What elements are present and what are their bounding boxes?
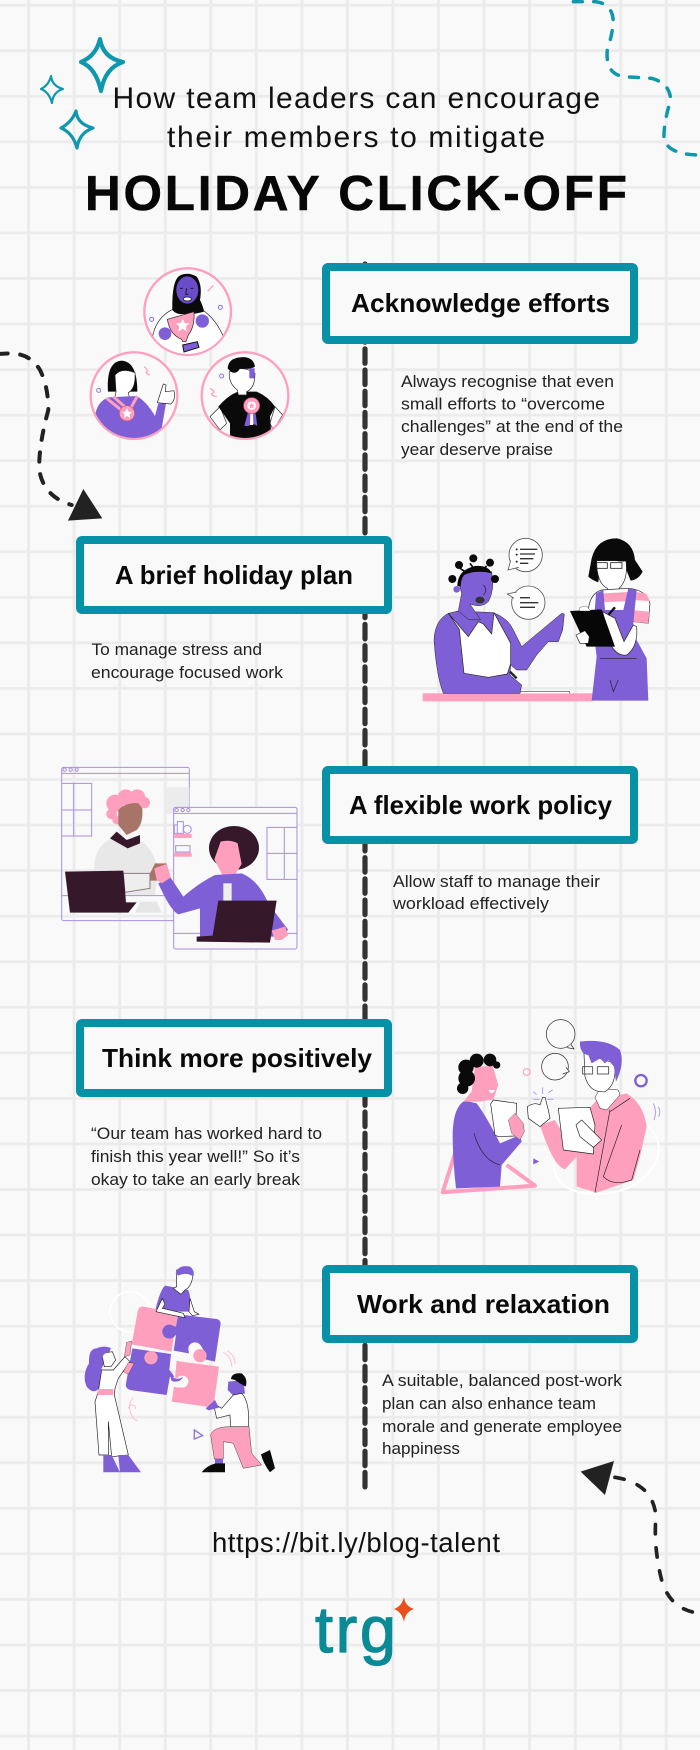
subtitle: How team leaders can encourage [112, 82, 600, 115]
icon: medium teal sparkle [61, 111, 93, 148]
man right [202, 1373, 275, 1472]
panel: flexible work policy heading [326, 770, 634, 840]
text: brief holiday plan [91, 640, 284, 682]
central dashed timeline [362, 264, 368, 1488]
title block [85, 82, 627, 221]
icon: small teal sparkle [41, 76, 63, 103]
link text: https://bit.ly/blog-talent [212, 1527, 500, 1558]
left person [65, 789, 170, 913]
small decorative marks [128, 1351, 235, 1439]
text: work and relaxation: A suitable, balanced post-work [382, 1371, 623, 1390]
white ring [110, 1292, 150, 1332]
person with trophy [144, 268, 231, 357]
panel: work and relaxation heading: Work and relaxation [357, 1289, 610, 1319]
desk [423, 693, 593, 701]
right person [527, 1041, 647, 1193]
text: flexible work policy [392, 872, 600, 913]
text: work and relaxation: morale and generate employee [382, 1417, 622, 1436]
subtitle [112, 82, 600, 154]
front window [174, 807, 297, 949]
text: acknowledge efforts [401, 372, 623, 459]
arrow: left dashed curve [0, 353, 102, 521]
illustration: three award winners [91, 268, 288, 439]
top man [155, 1266, 194, 1312]
heading: HOLIDAY CLICK-OFF [85, 166, 627, 221]
panel: think more positively heading [80, 1023, 388, 1093]
text: brief holiday plan: encourage focused work [91, 663, 284, 682]
puzzle [126, 1307, 221, 1408]
logo: trg: trg [315, 1593, 396, 1666]
panel: brief holiday plan heading: A brief holiday plan [115, 560, 353, 590]
text: work and relaxation: happiness [382, 1439, 460, 1458]
text: acknowledge efforts: small efforts to “overcome [401, 394, 605, 414]
illustration: video call colleagues [62, 767, 297, 949]
panel: think more positively heading: Think more positively [102, 1043, 373, 1073]
text: think more positively: “Our team has worked hard to [91, 1124, 322, 1143]
text: work and relaxation [382, 1371, 623, 1458]
text: flexible work policy: workload effectively [392, 894, 550, 913]
text: think more positively [91, 1124, 322, 1189]
speech bubbles [507, 538, 545, 619]
decorative shapes [443, 1069, 660, 1194]
right person [570, 538, 650, 701]
text: think more positively: finish this year well!” So it’s [91, 1147, 300, 1166]
illustration: colleagues with notepads [443, 1020, 660, 1194]
text: brief holiday plan: To manage stress and [92, 640, 262, 659]
illustration: team assembling puzzle [85, 1266, 275, 1472]
panel: flexible work policy heading: A flexible work policy [349, 790, 613, 820]
text: acknowledge efforts: Always recognise that even [401, 372, 614, 391]
arrow: bottom right dashed curve [581, 1461, 700, 1613]
panel: brief holiday plan heading [80, 540, 388, 610]
panel: work and relaxation heading [326, 1269, 634, 1339]
subtitle: their members to mitigate [167, 121, 545, 154]
speech bubbles [542, 1020, 575, 1080]
left person [453, 1054, 524, 1188]
text: flexible work policy: Allow staff to manage their [393, 872, 600, 891]
text: acknowledge efforts: year deserve praise [401, 440, 553, 459]
top man arms [156, 1298, 199, 1318]
woman left [85, 1341, 141, 1472]
text: think more positively: okay to take an early break [91, 1170, 301, 1189]
panel: acknowledge efforts heading: Acknowledge efforts [351, 288, 610, 318]
icon: large teal sparkle [81, 39, 123, 91]
person with rosette [202, 352, 288, 439]
dashed curve: top right teal [573, 2, 700, 155]
left person [434, 554, 564, 693]
text: work and relaxation: plan can also enhance team [382, 1394, 596, 1413]
back window [62, 767, 189, 921]
person with medal [91, 352, 177, 439]
text: acknowledge efforts: challenges” at the end of the [401, 417, 623, 436]
right person [154, 826, 288, 943]
panel: acknowledge efforts heading [326, 267, 634, 340]
illustration: two colleagues discussing [423, 538, 650, 701]
